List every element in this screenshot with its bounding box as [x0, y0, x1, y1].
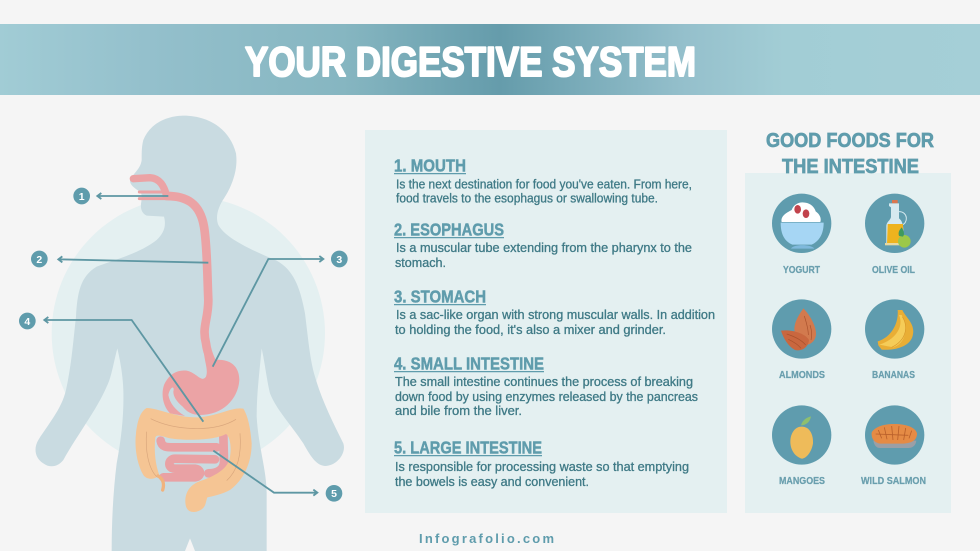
footer credit: Infografolio.com	[419, 531, 554, 546]
colon fold lines	[146, 419, 240, 481]
label: wild salmon: WILD SALMON	[861, 476, 926, 487]
badge numbers: 2	[36, 254, 42, 266]
section 2: esophagus: 2. ESOPHAGUS	[394, 220, 504, 240]
section 4: small intestine	[394, 354, 698, 418]
section 1: mouth	[394, 156, 692, 206]
leader lines	[44, 193, 323, 496]
section 4: small intestine: The small intestine continues the process of breaking	[395, 375, 693, 389]
human silhouette	[36, 116, 344, 551]
section 1: mouth: Is the next destination for food you've eaten. From here,	[396, 178, 692, 192]
section 1: mouth: food travels to the esophagus or swallowing tube.	[396, 192, 658, 206]
arrow 3	[213, 256, 323, 367]
background circle	[52, 197, 325, 470]
body illustration	[19, 116, 348, 551]
section 3: stomach: to holding the food, it's also a mixer and grinder.	[395, 323, 666, 337]
icon: bananas	[865, 299, 924, 359]
label: yogurt: YOGURT	[783, 265, 820, 276]
panel: digestive organs text	[365, 130, 727, 513]
section 1: mouth: 1. MOUTH	[394, 156, 466, 176]
section 3: stomach: Is a sac-like organ with strong muscular walls. In addition	[396, 308, 715, 322]
section 5: large intestine: Is responsible for processing waste so that emptying	[395, 460, 689, 474]
icon: wild salmon	[865, 405, 924, 465]
foods heading	[766, 130, 934, 178]
foods heading: THE INTESTINE	[782, 156, 919, 178]
badge numbers: 5	[331, 488, 337, 500]
foods heading: GOOD FOODS FOR	[766, 130, 934, 152]
label: mangoes: MANGOES	[779, 476, 825, 487]
arrow 5	[213, 451, 317, 496]
large intestine	[135, 408, 252, 512]
header banner	[0, 24, 980, 95]
section 4: small intestine: 4. SMALL INTESTINE	[394, 354, 544, 374]
badge numbers: 3	[336, 254, 342, 266]
icon: almonds	[772, 299, 831, 359]
section 3: stomach	[394, 286, 715, 337]
section 3: stomach: 3. STOMACH	[394, 286, 486, 306]
icon: mango	[772, 405, 831, 465]
section 2: esophagus: Is a muscular tube extending from the pharynx to the	[396, 241, 692, 255]
appendix	[158, 476, 163, 490]
small intestine	[161, 435, 224, 477]
label: olive oil: OLIVE OIL	[872, 265, 915, 276]
stomach	[163, 353, 239, 416]
title: YOUR DIGESTIVE SYSTEM	[245, 38, 696, 85]
panel: good foods	[745, 130, 951, 513]
section 4: small intestine: and bile from the liver.	[395, 404, 522, 418]
section 2: esophagus	[394, 220, 692, 270]
icon: olive oil	[865, 194, 924, 253]
icon: yogurt	[772, 194, 831, 253]
section 5: large intestine: 5. LARGE INTESTINE	[394, 438, 542, 458]
badge numbers: 1	[79, 191, 85, 203]
arrow 4	[44, 317, 203, 422]
section 2: esophagus: stomach.	[395, 256, 446, 270]
label: bananas: BANANAS	[872, 370, 915, 381]
section 5: large intestine: the bowels is easy and convenient.	[395, 475, 589, 489]
section 4: small intestine: down food by using enzymes released by the pancreas	[395, 390, 698, 404]
badge numbers: 4	[24, 316, 30, 328]
number badges	[19, 188, 348, 502]
arrow 2	[58, 256, 208, 263]
badge numbers	[24, 191, 342, 500]
section 5: large intestine	[394, 438, 689, 489]
mouth and esophagus	[133, 178, 213, 367]
label: almonds: ALMONDS	[779, 370, 825, 381]
arrow 1	[97, 193, 168, 199]
